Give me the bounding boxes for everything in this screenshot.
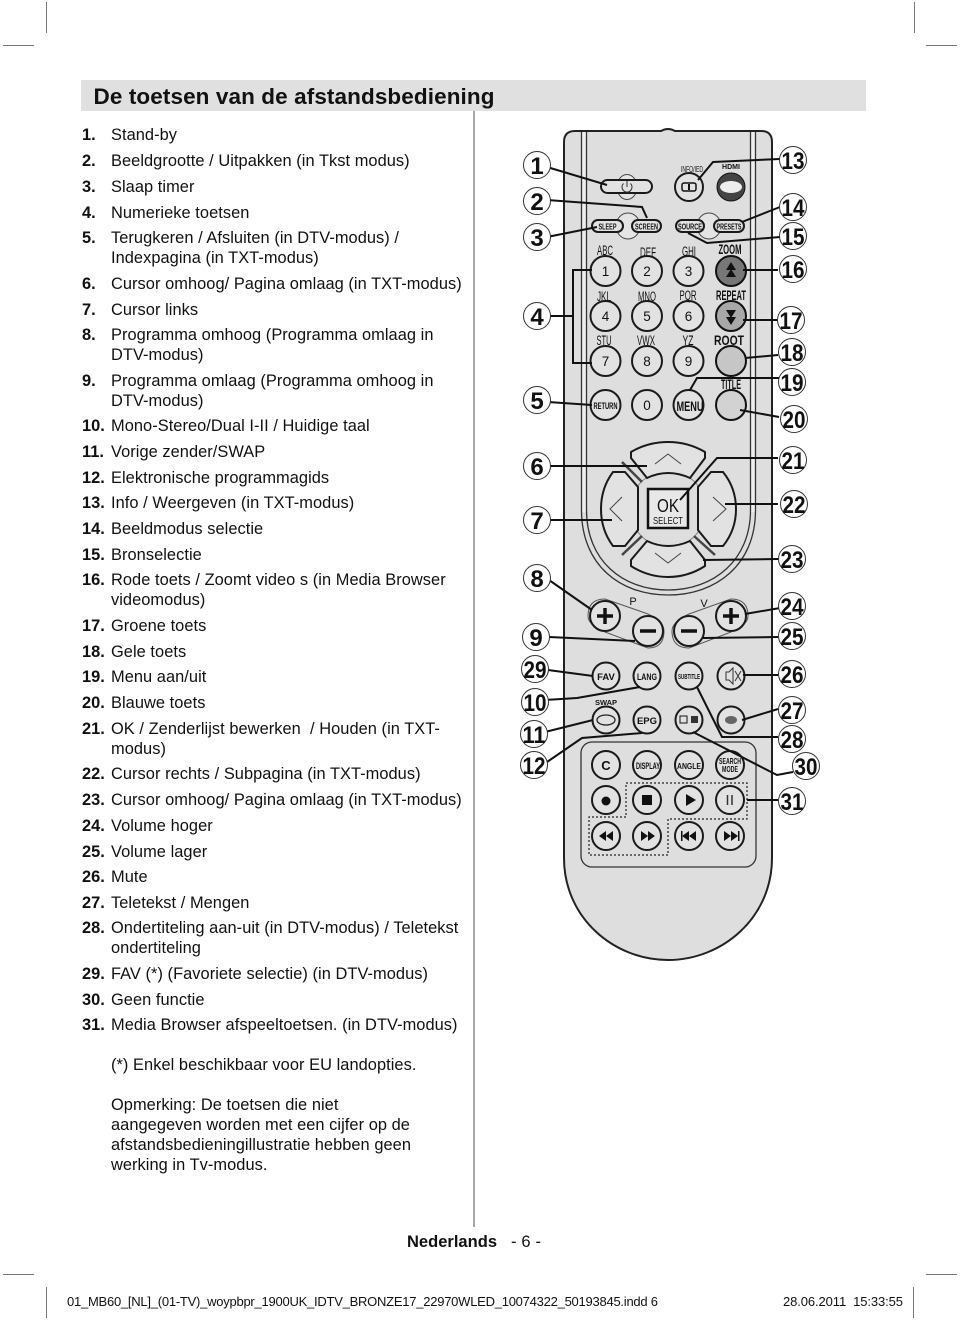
numbered button list: Media Browser afspeeltoetsen. (in DTV-modus) bbox=[111, 1016, 458, 1034]
numbered button list: 31. bbox=[82, 1016, 105, 1034]
media panel: DISPLAY bbox=[636, 761, 660, 772]
numbered button list: 21. bbox=[82, 720, 105, 738]
power row: INFO/IED bbox=[681, 165, 703, 174]
program and volume buttons: V bbox=[700, 598, 708, 610]
number pad: 8 bbox=[643, 354, 651, 369]
sleep, screen, source, presets buttons: PRESETS bbox=[716, 222, 742, 232]
numbered button list: 10. bbox=[82, 417, 105, 435]
numbered button list: OK / Zenderlijst bewerken / Houden (in TXT- bbox=[111, 720, 440, 738]
numbered button list: Indexpagina (in TXT-modus) bbox=[111, 249, 319, 267]
numbered button list: Cursor omhoog/ Pagina omlaag (in TXT-modus) bbox=[111, 791, 462, 809]
number pad: ROOT bbox=[714, 333, 745, 348]
navigation cluster: OK bbox=[657, 496, 679, 516]
function buttons: FAV bbox=[597, 672, 616, 683]
numbered button list: 4. bbox=[82, 204, 96, 222]
numbered button list: Beeldmodus selectie bbox=[111, 520, 263, 538]
note text bbox=[110, 1096, 411, 1174]
note text: werking in Tv-modus. bbox=[110, 1156, 267, 1174]
number callouts right: 16 bbox=[782, 257, 804, 284]
page number bbox=[407, 1233, 541, 1251]
numbered button list: 9. bbox=[82, 372, 96, 390]
numbered button list: 8. bbox=[82, 326, 96, 344]
number callouts left: 29 bbox=[524, 657, 546, 684]
numbered button list: Gele toets bbox=[111, 643, 186, 661]
number pad bbox=[590, 242, 746, 420]
number callouts left: 9 bbox=[529, 625, 543, 652]
number callouts right: 31 bbox=[780, 789, 804, 816]
program and volume buttons: P bbox=[629, 596, 637, 608]
number callouts left: 1 bbox=[530, 153, 544, 180]
note text: Opmerking: De toetsen die niet bbox=[111, 1096, 339, 1114]
numbered button list: 7. bbox=[82, 301, 96, 319]
numbered button list: modus) bbox=[111, 740, 166, 758]
numbered button list: 20. bbox=[82, 694, 105, 712]
number pad: 2 bbox=[643, 264, 651, 279]
media panel: MODE bbox=[722, 764, 738, 774]
numbered button list: Elektronische programmagids bbox=[111, 469, 329, 487]
number callouts right: 24 bbox=[780, 594, 804, 621]
numbered button list: Slaap timer bbox=[111, 178, 195, 196]
footnote: EU: (*) Enkel beschikbaar voor EU landopties. bbox=[111, 1056, 416, 1074]
number pad: JKL bbox=[597, 289, 611, 304]
numbered button list: Ondertiteling aan-uit (in DTV-modus) / Teletekst bbox=[111, 919, 459, 937]
numbered button list: 17. bbox=[82, 617, 105, 635]
note text: aangegeven worden met een cijfer op de bbox=[111, 1116, 410, 1134]
numbered button list: Groene toets bbox=[111, 617, 206, 635]
function buttons: EPG bbox=[637, 716, 657, 727]
number pad: 3 bbox=[685, 264, 692, 279]
number pad: DEF bbox=[640, 245, 656, 260]
print footer: 28.06.2011 15:33:55 bbox=[783, 1294, 903, 1309]
numbered button list: 18. bbox=[82, 643, 105, 661]
number pad: MENU bbox=[676, 399, 704, 414]
number callouts right: 14 bbox=[782, 195, 805, 222]
numbered button list: Cursor omhoog/ Pagina omlaag (in TXT-modus) bbox=[111, 275, 462, 293]
number callouts left: 6 bbox=[530, 454, 544, 481]
number callouts right: 20 bbox=[782, 407, 806, 434]
number callouts right: 23 bbox=[780, 547, 804, 574]
numbered button list: Menu aan/uit bbox=[111, 668, 207, 686]
number callouts right: 27 bbox=[780, 698, 804, 725]
numbered button list: 22. bbox=[82, 765, 105, 783]
numbered button list: videomodus) bbox=[111, 591, 205, 609]
navigation cluster: SELECT bbox=[653, 515, 683, 527]
number callouts left: 5 bbox=[530, 388, 544, 415]
numbered button list: DTV-modus) bbox=[111, 392, 204, 410]
heading bar bbox=[81, 80, 866, 111]
leader lines bbox=[545, 159, 793, 800]
number callouts right: 18 bbox=[780, 340, 804, 367]
media panel: SEARCH bbox=[719, 756, 741, 766]
number callouts left: 10 bbox=[524, 690, 546, 717]
print footer: 01_MB60_[NL]_(01-TV)_woypbpr_1900UK_IDTV_BRONZE17_22970WLED_10074322_50193845.indd 6 bbox=[67, 1294, 658, 1309]
number pad: 1 bbox=[602, 264, 609, 279]
number pad: ZOOM bbox=[718, 242, 742, 257]
number callouts right: 21 bbox=[782, 448, 804, 475]
numbered button list: Terugkeren / Afsluiten (in DTV-modus) / bbox=[111, 229, 399, 247]
numbered button list: 13. bbox=[82, 494, 105, 512]
number callouts right: 25 bbox=[780, 624, 804, 651]
number callouts right: 19 bbox=[780, 370, 804, 397]
remote body bbox=[564, 129, 772, 960]
function buttons bbox=[592, 662, 744, 734]
numbered button list: 23. bbox=[82, 791, 105, 809]
numbered button list: 27. bbox=[82, 894, 105, 912]
numbered button list: 6. bbox=[82, 275, 96, 293]
number pad: ABC bbox=[597, 243, 613, 258]
numbered button list: 1. bbox=[82, 126, 96, 144]
number pad: 6 bbox=[685, 309, 692, 324]
number callouts left: 12 bbox=[522, 753, 546, 780]
sleep, screen, source, presets buttons: SOURCE bbox=[678, 222, 702, 232]
numbered button list: ondertiteling bbox=[111, 939, 201, 957]
number callouts right bbox=[778, 146, 820, 816]
number pad: MNO bbox=[638, 289, 656, 304]
number callouts left: 7 bbox=[530, 508, 544, 535]
number pad: GHI bbox=[682, 244, 696, 259]
number pad: 0 bbox=[643, 398, 651, 413]
number callouts left bbox=[520, 152, 550, 780]
media panel: ANGLE bbox=[677, 761, 701, 771]
program and volume buttons bbox=[588, 596, 748, 648]
navigation cluster bbox=[601, 442, 736, 577]
numbered button list: Mono-Stereo/Dual I-II / Huidige taal bbox=[111, 417, 370, 435]
numbered button list: Rode toets / Zoomt video s (in Media Browser bbox=[111, 571, 446, 589]
number callouts right: 13 bbox=[782, 148, 804, 175]
number callouts right: 28 bbox=[780, 727, 804, 754]
numbered button list: 24. bbox=[82, 817, 105, 835]
numbered button list: Stand-by bbox=[111, 126, 178, 144]
page number: - 6 - bbox=[511, 1233, 541, 1251]
numbered button list: FAV (*) (Favoriete selectie) (in DTV-modus) bbox=[111, 965, 428, 983]
numbered button list: Cursor rechts / Subpagina (in TXT-modus) bbox=[111, 765, 421, 783]
numbered button list: Beeldgrootte / Uitpakken (in Tkst modus) bbox=[111, 152, 410, 170]
numbered button list: 12. bbox=[82, 469, 105, 487]
numbered button list: Teletekst / Mengen bbox=[111, 894, 249, 912]
function buttons: SWAP bbox=[595, 698, 617, 707]
number callouts left: 3 bbox=[530, 225, 544, 252]
note text: afstandsbedieningillustratie hebben geen bbox=[111, 1136, 411, 1154]
numbered button list: 28. bbox=[82, 919, 105, 937]
number pad: PQR bbox=[680, 288, 697, 303]
numbered button list: 14. bbox=[82, 520, 105, 538]
function buttons: SUBTITLE bbox=[678, 674, 700, 681]
number pad: STU bbox=[596, 333, 612, 348]
number pad: 7 bbox=[602, 354, 609, 369]
number callouts left: 8 bbox=[530, 566, 544, 593]
numbered button list: 2. bbox=[82, 152, 96, 170]
numbered button list: 19. bbox=[82, 668, 105, 686]
numbered button list: 29. bbox=[82, 965, 105, 983]
numbered button list: Volume hoger bbox=[111, 817, 213, 835]
page number: Nederlands bbox=[407, 1233, 497, 1251]
numbered button list bbox=[82, 126, 462, 1034]
numbered button list: Volume lager bbox=[111, 843, 208, 861]
number pad: TITLE bbox=[721, 377, 741, 392]
numbered button list: 26. bbox=[82, 868, 105, 886]
numbered button list: 3. bbox=[82, 178, 96, 196]
number callouts left: 11 bbox=[522, 722, 546, 749]
numbered button list: Cursor links bbox=[111, 301, 198, 319]
media panel bbox=[581, 742, 756, 867]
number callouts left: 2 bbox=[530, 189, 544, 216]
sleep, screen, source, presets buttons: SCREEN bbox=[635, 222, 658, 232]
heading bar: De toetsen van de afstandsbediening bbox=[94, 84, 494, 109]
numbered button list: DTV-modus) bbox=[111, 346, 204, 364]
number pad: YZ bbox=[682, 333, 694, 348]
power row bbox=[601, 164, 745, 201]
numbered button list: Geen functie bbox=[111, 991, 205, 1009]
numbered button list: Mute bbox=[111, 868, 148, 886]
number callouts left: 4 bbox=[530, 304, 544, 331]
numbered button list: Numerieke toetsen bbox=[111, 204, 249, 222]
numbered button list: Blauwe toets bbox=[111, 694, 205, 712]
numbered button list: Bronselectie bbox=[111, 546, 202, 564]
number pad: VWX bbox=[637, 333, 655, 348]
number callouts right: 22 bbox=[782, 492, 806, 519]
numbered button list: 30. bbox=[82, 991, 105, 1009]
function buttons: LANG bbox=[637, 672, 657, 683]
numbered button list: Vorige zender/SWAP bbox=[111, 443, 265, 461]
numbered button list: Programma omhoog (Programma omlaag in bbox=[111, 326, 434, 344]
number pad: 9 bbox=[685, 354, 692, 369]
numbered button list: 25. bbox=[82, 843, 105, 861]
sleep, screen, source, presets buttons bbox=[592, 213, 744, 239]
number callouts right: 30 bbox=[794, 754, 818, 781]
number pad: REPEAT bbox=[716, 288, 746, 303]
numbered button list: 5. bbox=[82, 229, 96, 247]
power row: HDMI bbox=[722, 164, 740, 171]
remote control bbox=[520, 129, 820, 960]
number callouts right: 26 bbox=[780, 662, 804, 689]
number pad: 4 bbox=[602, 309, 610, 324]
numbered button list: 16. bbox=[82, 571, 105, 589]
numbered button list: 15. bbox=[82, 546, 105, 564]
media panel: C bbox=[601, 758, 611, 773]
number callouts right: 17 bbox=[780, 308, 802, 335]
number callouts right: 15 bbox=[782, 224, 804, 251]
numbered button list: Programma omlaag (Programma omhoog in bbox=[111, 372, 434, 390]
numbered button list: Info / Weergeven (in TXT-modus) bbox=[111, 494, 354, 512]
numbered button list: 11. bbox=[82, 443, 104, 461]
number pad: 5 bbox=[643, 309, 651, 324]
number pad: RETURN bbox=[594, 401, 618, 411]
sleep, screen, source, presets buttons: SLEEP bbox=[598, 222, 617, 232]
